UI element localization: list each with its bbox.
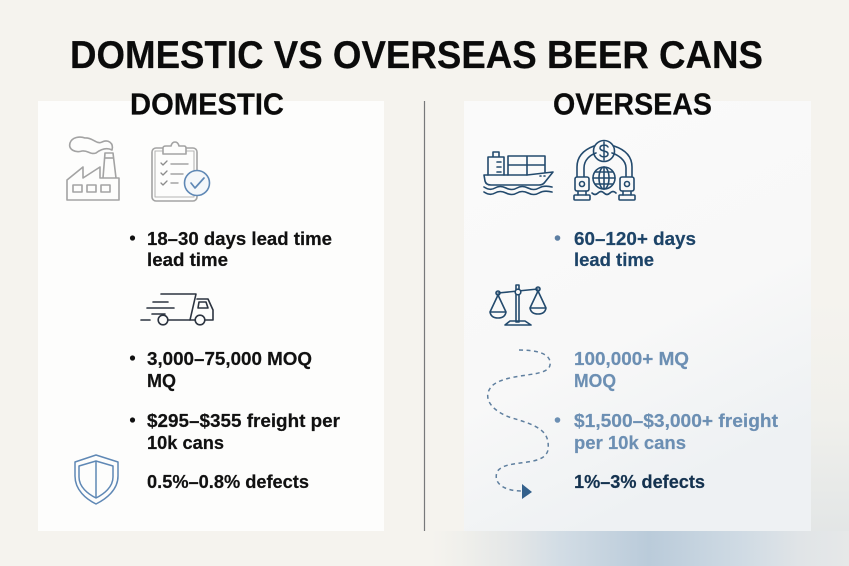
- text: freight: [130, 410, 340, 453]
- text: minimum order quantity: [130, 348, 312, 391]
- icon: shield: [75, 455, 118, 504]
- text: minimum order quantity: 3,000–75,000 MOQ: [147, 348, 312, 369]
- overseas panel background: [464, 101, 811, 531]
- text: lead time: [130, 228, 332, 270]
- text: lead time: 18–30 days lead time: [147, 228, 332, 249]
- overseas heading: OVERSEAS: [553, 88, 712, 122]
- arrow: dashed winding route: [488, 350, 550, 499]
- text: freight: per 10k cans: [574, 432, 686, 453]
- text: lead time: lead time: [574, 249, 654, 270]
- text: minimum order quantity: MOQ: [574, 370, 616, 391]
- icon: delivery truck: [141, 294, 213, 325]
- text: freight: 10k cans: [147, 432, 224, 453]
- title: DOMESTIC VS OVERSEAS BEER CANS: [70, 34, 763, 77]
- center divider: [424, 101, 426, 531]
- icon: balance scale: [490, 285, 546, 325]
- icon: factory: [67, 137, 119, 200]
- domestic heading: DOMESTIC: [130, 88, 284, 122]
- bullet: [130, 235, 135, 241]
- bullet: [130, 355, 135, 361]
- text: defects: 0.5%–0.8% defects: [147, 471, 309, 492]
- text: freight: $1,500–$3,000+ freight: [574, 410, 778, 431]
- text: defects: 1%–3% defects: [574, 471, 705, 492]
- icon: container ship: [484, 152, 553, 194]
- icon: arch with dollar and globe: [574, 140, 635, 200]
- icon: clipboard with check: [152, 142, 210, 201]
- bullet: [130, 417, 135, 423]
- panel: overseas: [464, 88, 811, 531]
- text: lead time: [555, 228, 696, 270]
- panel: domestic: [38, 88, 384, 531]
- domestic panel background: [38, 101, 384, 531]
- text: minimum order quantity: [574, 348, 689, 391]
- text: freight: $295–$355 freight per: [147, 410, 340, 431]
- text: lead time: lead time: [147, 249, 228, 270]
- text: minimum order quantity: MQ: [147, 370, 176, 391]
- bullet: [555, 417, 560, 423]
- text: minimum order quantity: 100,000+ MQ: [574, 348, 689, 369]
- bullet: [555, 235, 560, 241]
- text: lead time: 60–120+ days: [574, 228, 696, 249]
- text: freight: [555, 410, 778, 453]
